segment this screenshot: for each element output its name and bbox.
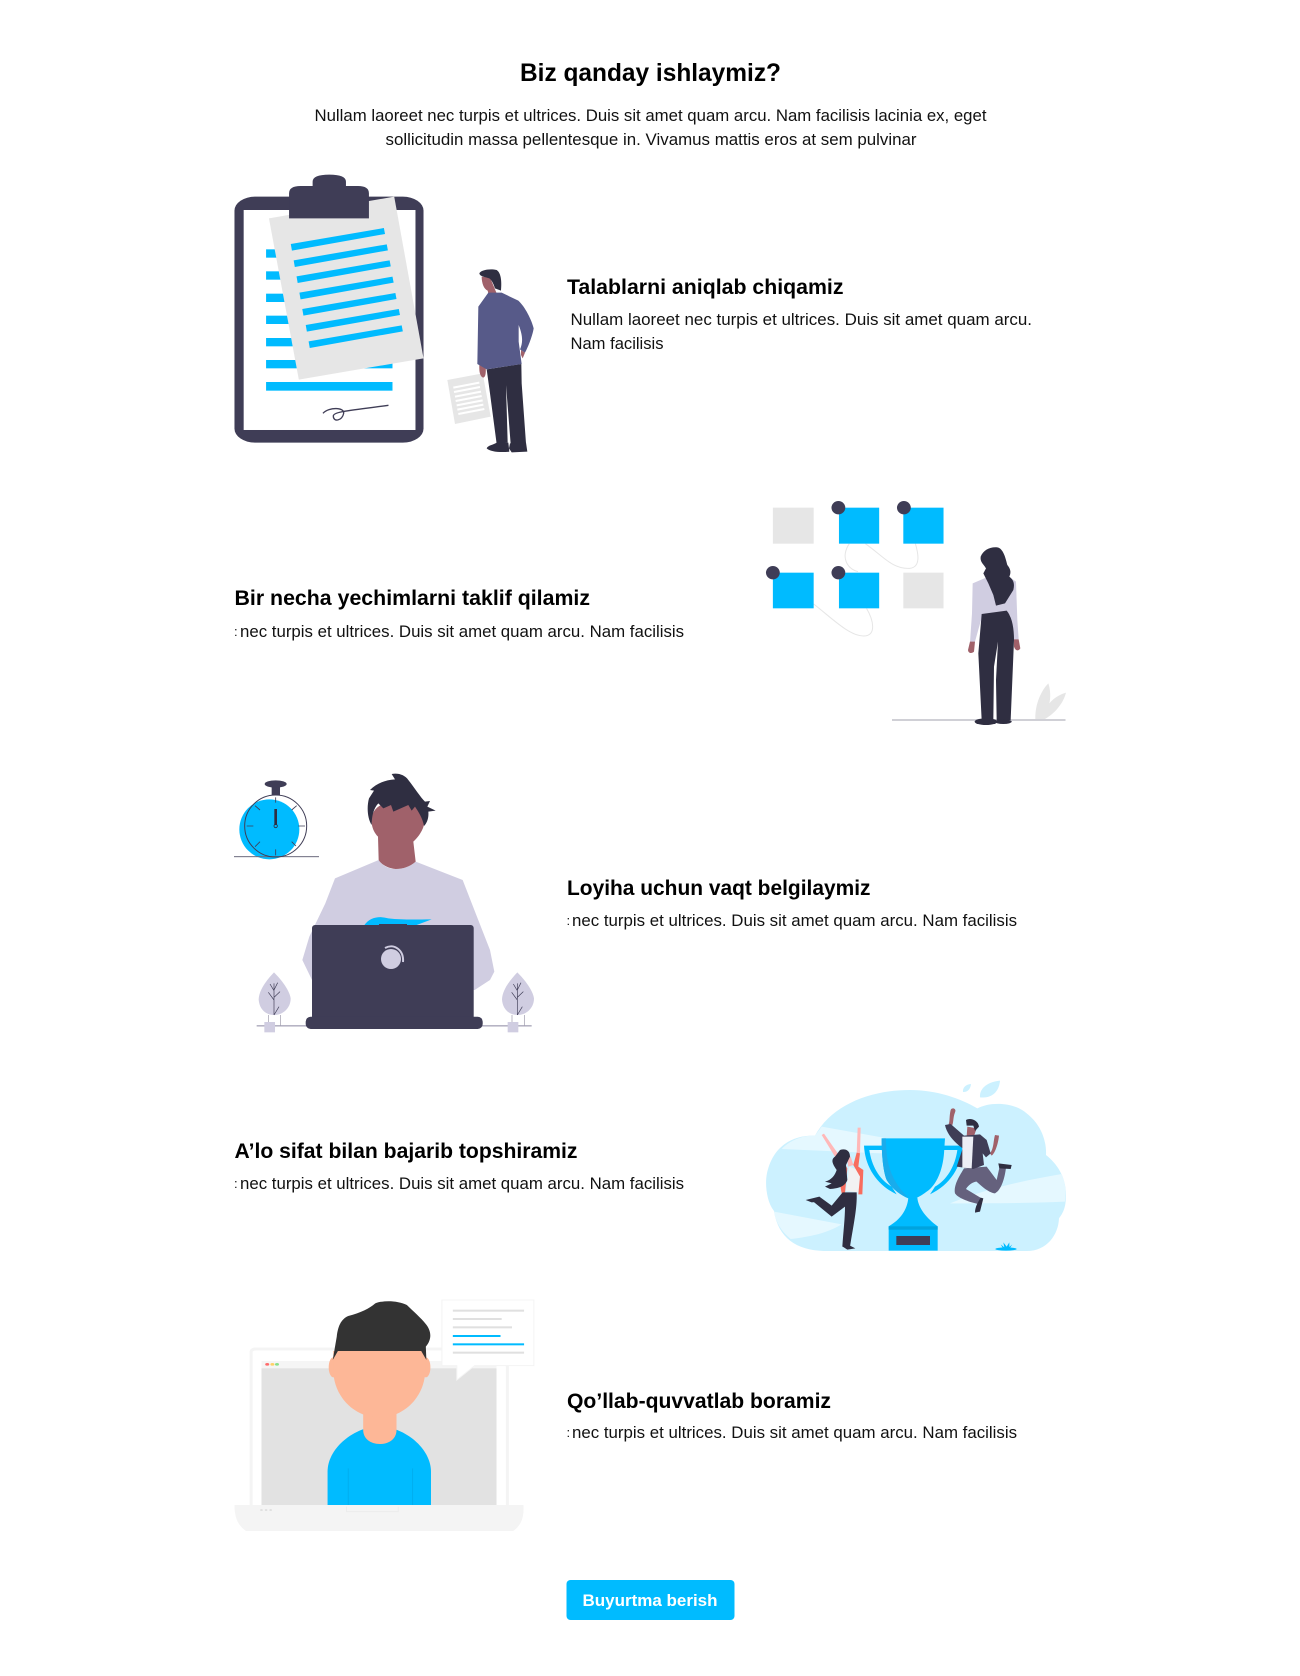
intro text: [314, 107, 987, 149]
description: :: [234, 1176, 238, 1191]
description: :: [566, 913, 570, 928]
header: [314, 59, 987, 149]
description: [570, 311, 1032, 353]
clip: [289, 175, 369, 218]
intro text: Nullam laoreet nec turpis et ultrices. Duis sit amet quam arcu. Nam facilisis lacinia ex, eget: [314, 107, 987, 125]
illustration: person on laptop screen: [234, 1300, 534, 1531]
description: :: [566, 1425, 570, 1440]
speech bubble: [442, 1300, 534, 1380]
person: [302, 774, 494, 990]
description: nec turpis et ultrices. Duis sit amet quam arcu. Nam facilisis: [572, 912, 1017, 930]
clipboard board: [234, 197, 424, 443]
flower: [995, 1242, 1017, 1251]
laptop: [234, 1349, 524, 1531]
woman and leaf: [968, 547, 1066, 725]
description: nec turpis et ultrices. Duis sit amet quam arcu. Nam facilisis: [240, 623, 684, 641]
title: Biz qanday ishlaymiz?: [520, 59, 781, 87]
laptop: [306, 924, 483, 1029]
description: nec turpis et ultrices. Duis sit amet quam arcu. Nam facilisis: [572, 1424, 1017, 1442]
heading: Qo’llab-quvvatlab boramiz: [567, 1390, 831, 1413]
ground line: [892, 719, 1066, 721]
step 5 text: [566, 1390, 1017, 1442]
intro text: sollicitudin massa pellentesque in. Vivamus mattis eros at sem pulvinar: [386, 131, 917, 149]
person: [328, 1301, 431, 1505]
man with document: [447, 269, 534, 452]
paper sheet: [269, 197, 424, 380]
sticky notes: [766, 501, 944, 608]
illustration: trophy and celebrating people: [766, 1081, 1066, 1251]
description: :: [234, 624, 238, 639]
stopwatch: [234, 780, 319, 859]
heading: Loyiha uchun vaqt belgilaymiz: [567, 877, 870, 900]
step 4 text: [234, 1140, 684, 1193]
button: [566, 1580, 734, 1620]
plants: [257, 972, 534, 1032]
woman: [806, 1128, 863, 1250]
step 1 text: [567, 276, 1032, 353]
step 3 text: [566, 877, 1017, 930]
description: nec turpis et ultrices. Duis sit amet quam arcu. Nam facilisis: [240, 1175, 684, 1193]
cloud background: [766, 1081, 1066, 1251]
connector curves: [814, 544, 918, 636]
button: Buyurtma berish: [582, 1592, 718, 1610]
man: [945, 1108, 1012, 1213]
heading: Talablarni aniqlab chiqamiz: [567, 276, 844, 299]
heading: Bir necha yechimlarni taklif qilamiz: [234, 587, 590, 610]
illustration: woman and sticky notes: [766, 501, 1066, 725]
illustration: clipboard and man: [234, 175, 534, 452]
heading: A’lo sifat bilan bajarib topshiramiz: [234, 1140, 578, 1163]
step 2 text: [234, 587, 684, 641]
description: Nam facilisis: [570, 335, 664, 353]
illustration: person with laptop and stopwatch: [234, 774, 534, 1032]
description: Nullam laoreet nec turpis et ultrices. Duis sit amet quam arcu.: [570, 311, 1032, 329]
trophy: [864, 1138, 963, 1251]
